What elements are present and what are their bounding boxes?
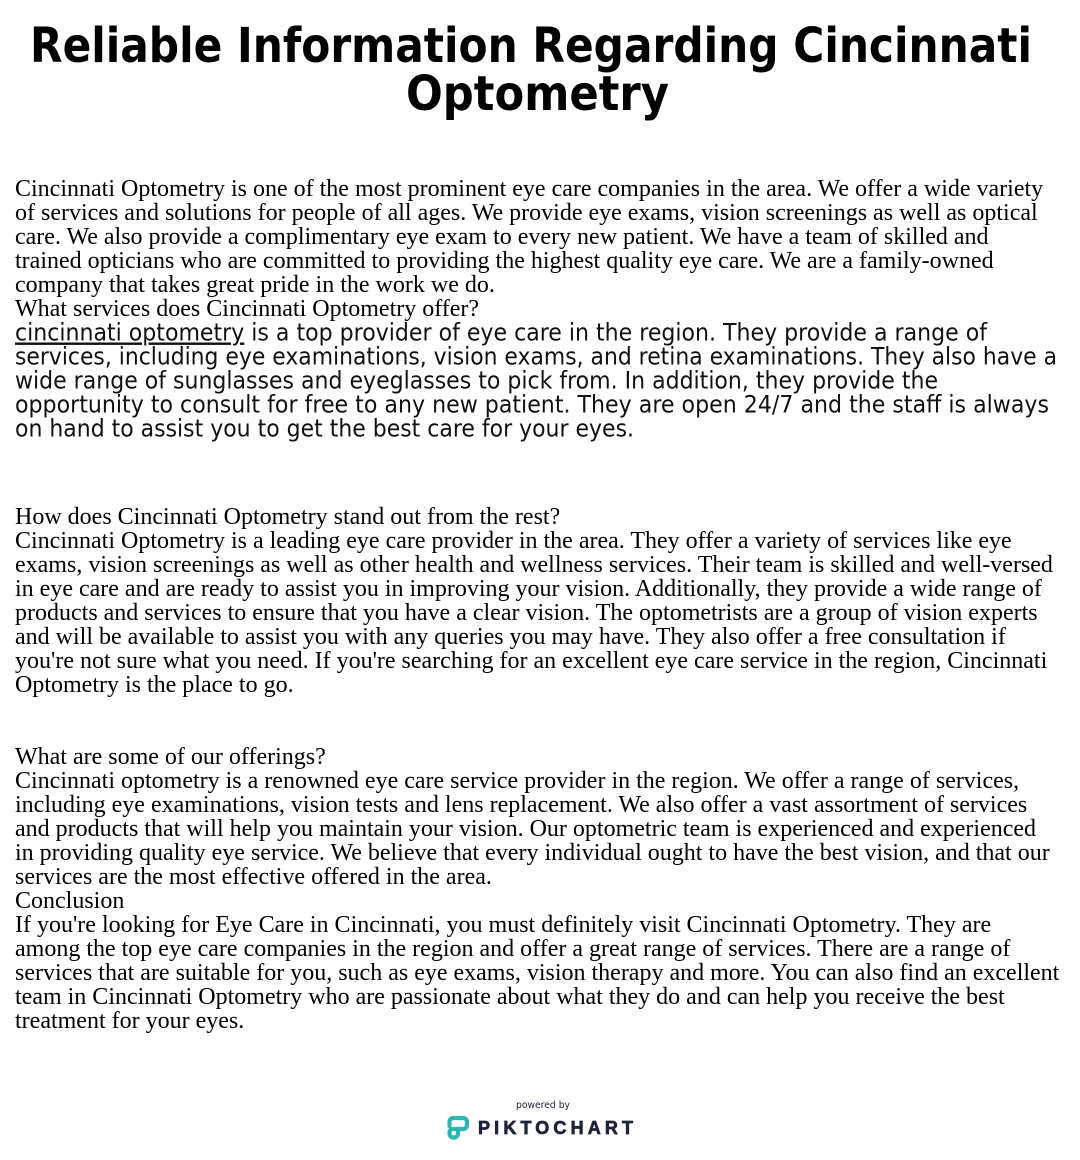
heading: services: What services does Cincinnati Optometry offer? <box>15 296 479 322</box>
heading: offerings: What are some of our offerings? <box>15 744 326 770</box>
intro paragraph <box>15 176 1044 298</box>
icon: piktochart mark <box>450 1118 467 1138</box>
powered by label: powered by <box>516 1100 570 1111</box>
stand out paragraph: products and services to ensure that you have a clear vision. The optometrists are a group of vision experts <box>15 600 1038 626</box>
services paragraph: wide range of sunglasses and eyeglasses to pick from. In addition, they provide the <box>15 366 938 394</box>
title: Optometry <box>406 66 669 122</box>
stand out paragraph: exams, vision screenings as well as other health and wellness services. Their team is skilled and well-versed <box>15 552 1053 578</box>
conclusion paragraph: team in Cincinnati Optometry who are passionate about what they do and can help you receive the best <box>15 984 1005 1010</box>
conclusion paragraph: treatment for your eyes. <box>15 1008 244 1034</box>
offerings paragraph <box>15 768 1050 890</box>
stand out paragraph: and will be available to assist you with any queries you may have. They also offer a free consultation if <box>15 624 1006 650</box>
services paragraph: on hand to assist you to get the best care for your eyes. <box>15 414 634 442</box>
conclusion paragraph <box>15 912 1060 1034</box>
intro paragraph: trained opticians who are committed to providing the highest quality eye care. We are a family-owned <box>15 248 994 274</box>
conclusion paragraph: among the top eye care companies in the region and offer a great range of services. There are a range of <box>15 936 1010 962</box>
stand out paragraph: Optometry is the place to go. <box>15 672 294 698</box>
conclusion paragraph: services that are suitable for you, such as eye exams, vision therapy and more. You can also find an excellent <box>15 960 1059 986</box>
wordmark: PIKTOCHART <box>478 1118 633 1138</box>
offerings paragraph: and products that will help you maintain your vision. Our optometric team is experienced and experienced <box>15 816 1036 842</box>
intro paragraph: care. We also provide a complimentary eye exam to every new patient. We have a team of skilled and <box>15 224 989 250</box>
heading: conclusion: Conclusion <box>15 888 124 914</box>
stand out paragraph: Cincinnati Optometry is a leading eye care provider in the area. They offer a variety of services like eye <box>15 528 1012 554</box>
intro paragraph: company that takes great pride in the work we do. <box>15 272 495 298</box>
offerings paragraph: Cincinnati optometry is a renowned eye care service provider in the region. We offer a range of services, <box>15 768 1019 794</box>
services paragraph <box>15 320 1057 442</box>
stand out paragraph: in eye care and are ready to assist you in improving your vision. Additionally, they provide a wide range of <box>15 576 1042 602</box>
intro paragraph: Cincinnati Optometry is one of the most prominent eye care companies in the area. We offer a wide variety <box>15 176 1043 202</box>
stand out paragraph: you're not sure what you need. If you're searching for an excellent eye care service in the region, Cincinnati <box>15 648 1047 674</box>
offerings paragraph: including eye examinations, vision tests and lens replacement. We also offer a vast assortment of services <box>15 792 1027 818</box>
heading: stand out: How does Cincinnati Optometry stand out from the rest? <box>15 504 560 530</box>
piktochart logo <box>447 1100 634 1140</box>
offerings paragraph: services are the most effective offered in the area. <box>15 864 492 890</box>
offerings paragraph: in providing quality eye service. We believe that every individual ought to have the best vision, and that our <box>15 840 1050 866</box>
intro paragraph: of services and solutions for people of all ages. We provide eye exams, vision screenings as well as optical <box>15 200 1038 226</box>
stand out paragraph <box>15 528 1053 698</box>
conclusion paragraph: If you're looking for Eye Care in Cincinnati, you must definitely visit Cincinnati Optometry. They are <box>15 912 991 938</box>
title <box>30 18 1032 122</box>
